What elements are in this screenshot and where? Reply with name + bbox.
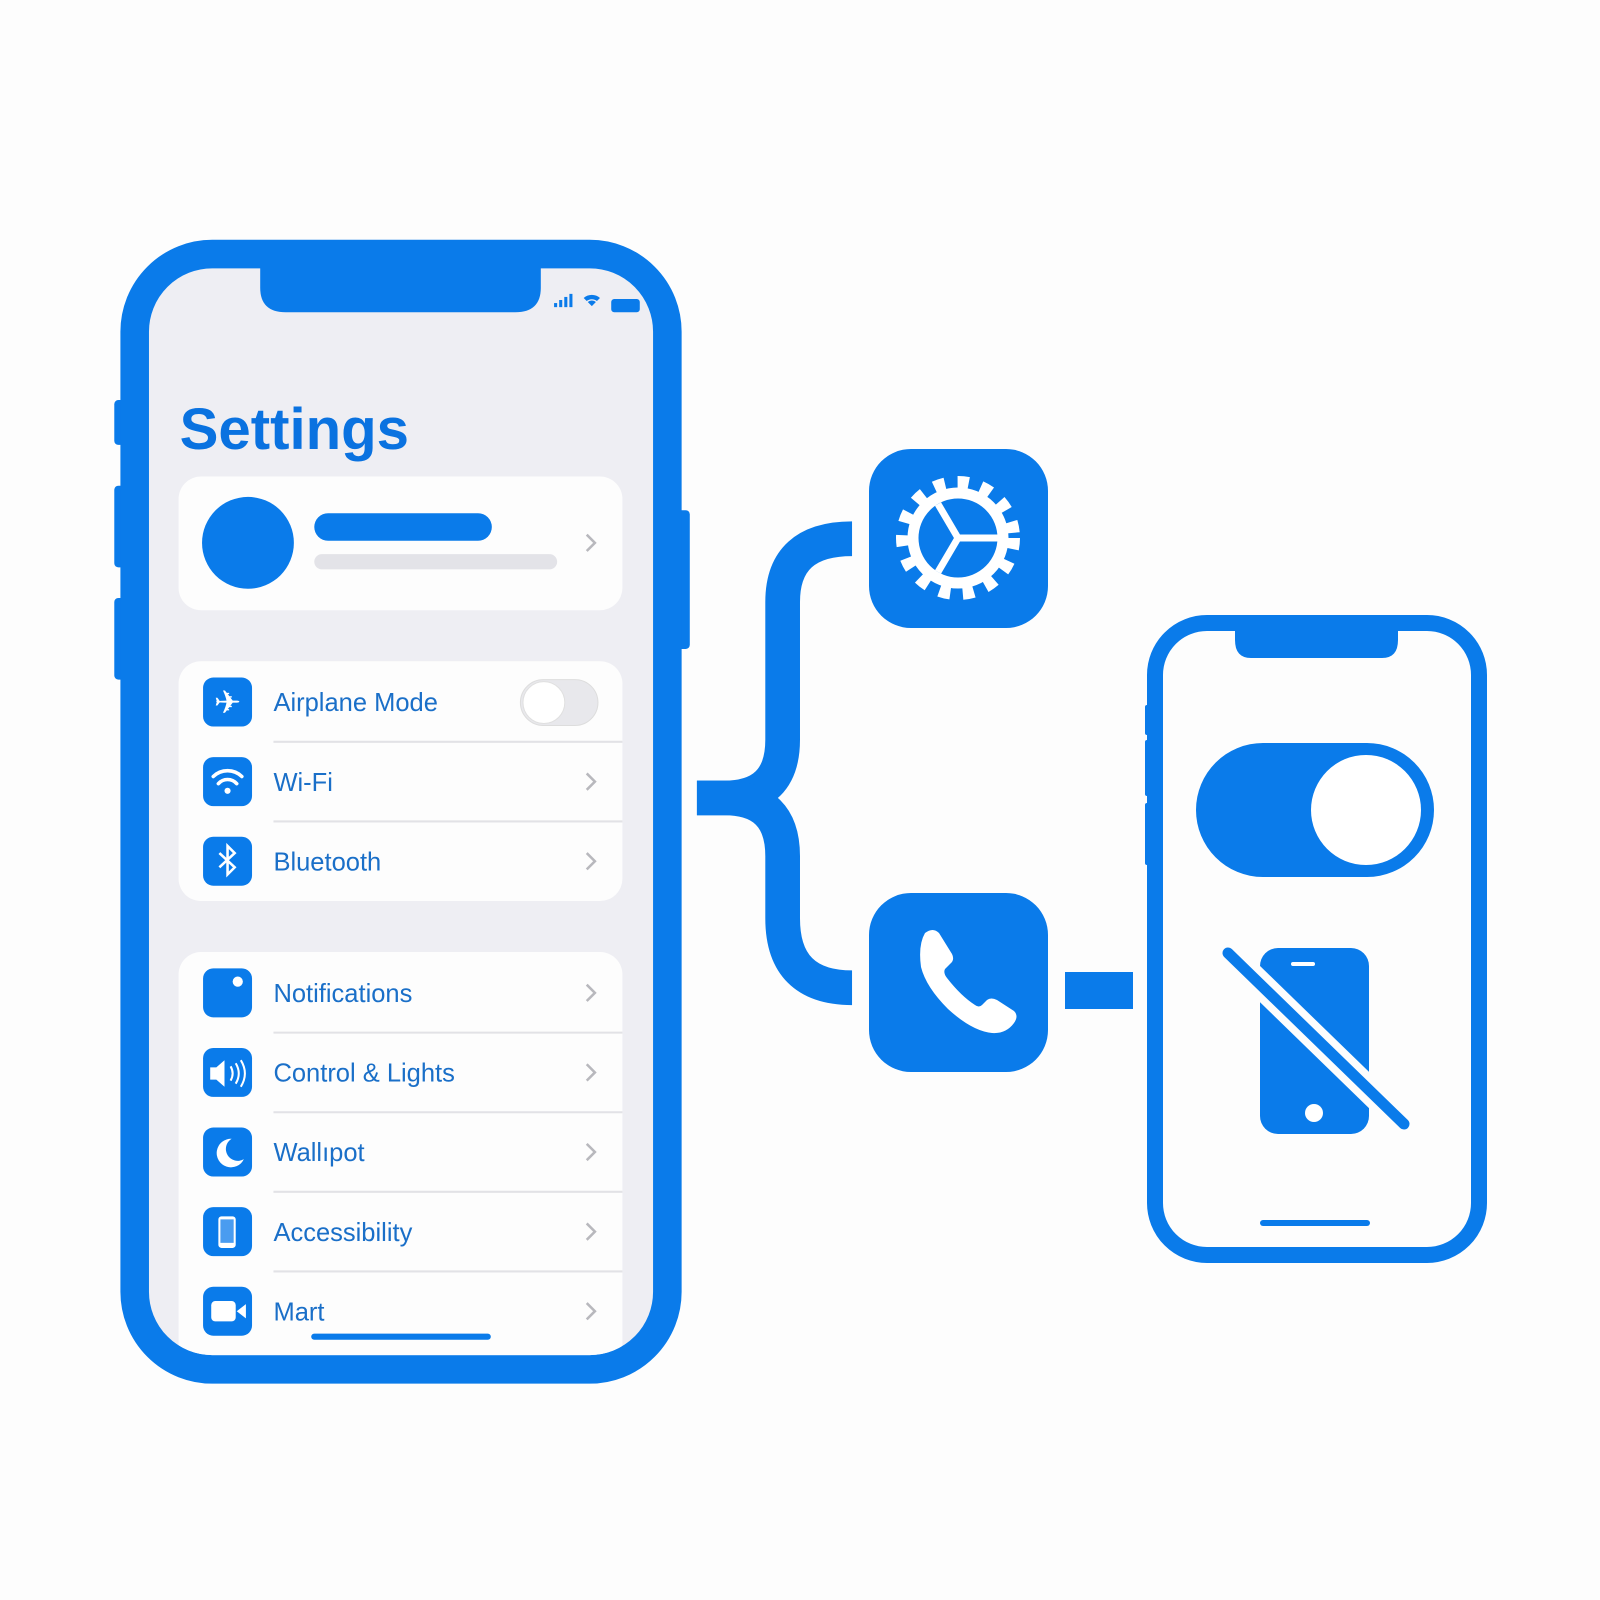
profile card: [179, 477, 622, 610]
icon: phone: [869, 893, 1048, 1072]
phone: toggle & no-phone: [1145, 623, 1487, 1255]
toggle switch: [1196, 743, 1434, 877]
card: connectivity: ✈: [214, 683, 241, 720]
card: connectivity: Airplane Mode: [273, 689, 438, 717]
notch: [260, 268, 541, 312]
phone frame: [135, 254, 667, 1369]
bracket connector: [697, 539, 852, 988]
card: connectivity: [179, 661, 622, 901]
card: general settings: Mart: [273, 1298, 324, 1326]
card: general settings: Accessibility: [273, 1219, 413, 1247]
side buttons: [114, 400, 690, 680]
icon: slashed phone: [1228, 948, 1404, 1134]
phone: settings screen: [114, 254, 690, 1381]
status icons: [554, 294, 640, 312]
card: general settings: Control & Lights: [273, 1060, 455, 1088]
card: general settings: Notifications: [273, 980, 412, 1008]
card: connectivity: Bluetooth: [273, 848, 381, 876]
home indicator: [311, 1334, 491, 1340]
connector line: [1065, 972, 1133, 1009]
card: general settings: [179, 952, 622, 1381]
title: Settings: Settings: [180, 397, 409, 462]
icon: settings gear: [869, 449, 1048, 628]
card: general settings: Wallıpot: [273, 1139, 365, 1167]
card: connectivity: Wi-Fi: [273, 769, 333, 797]
